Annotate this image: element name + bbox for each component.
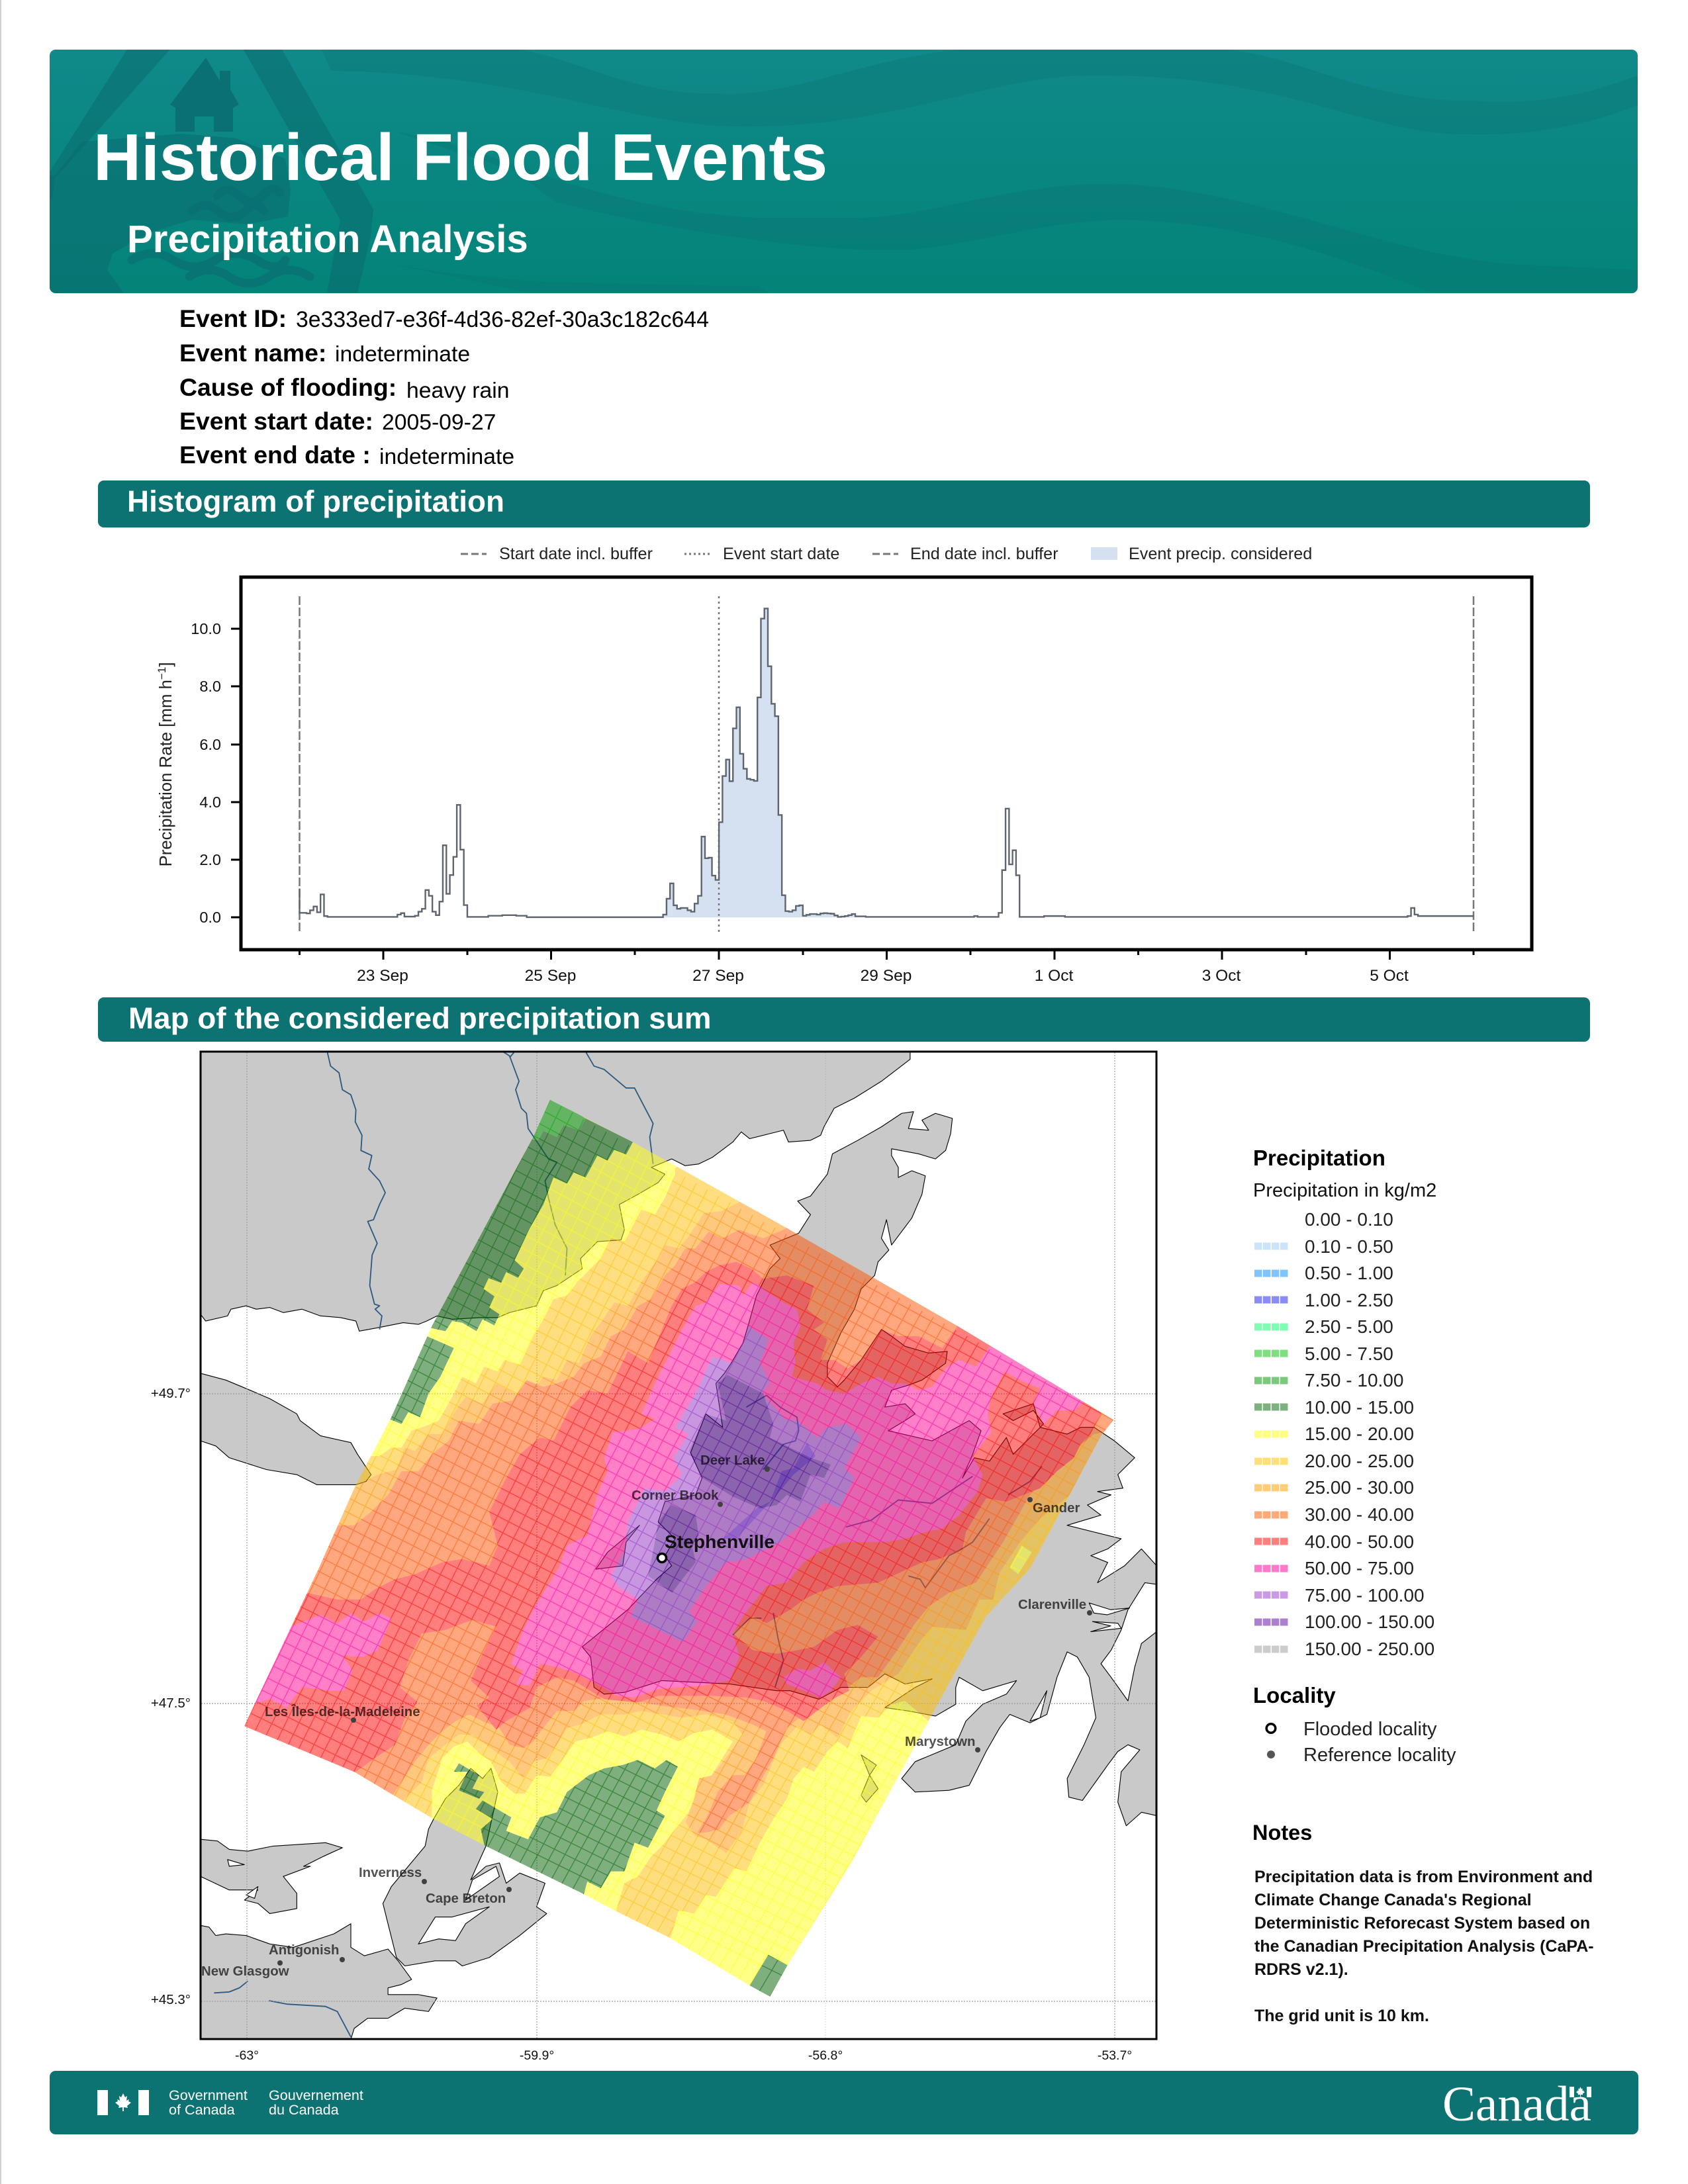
legend labels: 40.00 - 50.00 bbox=[1305, 1531, 1414, 1552]
graticule bbox=[201, 1052, 1156, 2038]
notes: Deterministic Reforecast System based on bbox=[1254, 1914, 1590, 1933]
section heading: histogram: Histogram of precipitation bbox=[127, 484, 504, 518]
event end date: Event end date : bbox=[179, 441, 371, 469]
reference locality labels: Deer Lake bbox=[700, 1453, 765, 1468]
notes bbox=[1252, 1821, 1594, 2025]
map bbox=[151, 1052, 1165, 2063]
event details bbox=[179, 304, 709, 469]
event id: 3e333ed7-e36f-4d36-82ef-30a3c182c644 bbox=[296, 307, 709, 332]
histogram chart: 2.0 bbox=[199, 851, 221, 868]
event name: indeterminate bbox=[335, 341, 470, 367]
event end date: indeterminate bbox=[379, 444, 514, 469]
buffer and event date lines bbox=[299, 596, 1474, 933]
flooded locality: Stephenville: Stephenville bbox=[665, 1531, 774, 1552]
government of canada wordmark: of Canada bbox=[169, 2101, 236, 2118]
reference locality labels: Cape Breton bbox=[426, 1891, 506, 1906]
event name: Event name: bbox=[179, 339, 326, 367]
notes: Notes bbox=[1252, 1821, 1312, 1844]
reference locality labels: Inverness bbox=[359, 1866, 422, 1880]
longitude labels: -59.9° bbox=[520, 2048, 554, 2063]
icon: water waves bbox=[127, 249, 314, 287]
histogram chart: 27 Sep bbox=[692, 967, 744, 985]
map frame bbox=[201, 1052, 1156, 2039]
x axis ticks and labels bbox=[299, 950, 1474, 960]
longitude labels: -53.7° bbox=[1098, 2048, 1132, 2063]
latitude labels: +47.5° bbox=[151, 1696, 191, 1711]
notes: Precipitation data is from Environment and bbox=[1254, 1868, 1593, 1886]
cause of flooding: heavy rain bbox=[406, 378, 509, 403]
land masses and rivers bbox=[201, 1052, 1156, 2039]
histogram legend bbox=[461, 545, 1312, 563]
icon: house bbox=[170, 58, 239, 132]
precipitation grid field bbox=[244, 1100, 1113, 1997]
header background artwork: waves and flood logo bbox=[50, 46, 1640, 296]
canada wordmark: Canada bbox=[1442, 2077, 1591, 2132]
precipitation considered fill bbox=[663, 608, 887, 917]
y axis title: −1 bbox=[156, 667, 168, 680]
histogram chart: 23 Sep bbox=[357, 967, 408, 985]
cause of flooding bbox=[179, 373, 509, 403]
page edge line bbox=[0, 0, 1, 2184]
histogram chart: 6.0 bbox=[199, 736, 221, 753]
legend: precipitation bbox=[1253, 1146, 1436, 1659]
legend labels: 7.50 - 10.00 bbox=[1305, 1370, 1403, 1390]
legend labels: 30.00 - 40.00 bbox=[1305, 1504, 1414, 1525]
reference locality labels: Les Îles-de-la-Madeleine bbox=[265, 1704, 420, 1719]
legend labels: 150.00 - 250.00 bbox=[1305, 1639, 1434, 1659]
water inlets bbox=[228, 1603, 1130, 1944]
histogram chart: 10.0 bbox=[191, 620, 221, 637]
longitude labels bbox=[235, 2048, 1132, 2063]
histogram chart: 3 Oct bbox=[1202, 967, 1241, 985]
legend: precipitation: Precipitation bbox=[1253, 1146, 1385, 1170]
legend: locality: Reference locality bbox=[1303, 1745, 1456, 1766]
reference locality markers bbox=[277, 1467, 1092, 1966]
longitude labels: -63° bbox=[235, 2048, 259, 2063]
event end date bbox=[179, 441, 514, 469]
reference locality labels: Marystown bbox=[905, 1735, 976, 1749]
legend labels: 0.10 - 0.50 bbox=[1305, 1236, 1393, 1257]
legend labels: 50.00 - 75.00 bbox=[1305, 1558, 1414, 1578]
histogram legend: Event start date bbox=[723, 545, 839, 563]
flooded locality: Stephenville bbox=[658, 1531, 774, 1562]
reference locality labels: Corner Brook bbox=[632, 1488, 719, 1503]
legend labels bbox=[1305, 1209, 1434, 1659]
y axis title: Precipitation Rate [mm h bbox=[157, 680, 175, 867]
precipitation step line bbox=[299, 608, 1474, 917]
icon: canada flag bbox=[97, 2090, 149, 2115]
section heading: histogram bbox=[98, 480, 1590, 527]
event start date: 2005-09-27 bbox=[382, 410, 496, 435]
notes: The grid unit is 10 km. bbox=[1254, 2007, 1429, 2025]
histogram chart: 4.0 bbox=[199, 794, 221, 811]
latitude labels bbox=[151, 1386, 191, 2007]
legend labels: 1.00 - 2.50 bbox=[1305, 1290, 1393, 1310]
notes: Climate Change Canada's Regional bbox=[1254, 1891, 1532, 1909]
subtitle: Precipitation Analysis bbox=[127, 218, 528, 261]
histogram chart: 5 Oct bbox=[1370, 967, 1409, 985]
government of canada wordmark bbox=[169, 2087, 363, 2118]
legend labels: 25.00 - 30.00 bbox=[1305, 1477, 1414, 1498]
reference locality labels: New Glasgow bbox=[201, 1964, 289, 1979]
section heading: map bbox=[98, 997, 1590, 1042]
y axis title: ] bbox=[157, 662, 175, 667]
footer bar bbox=[50, 2071, 1638, 2134]
government of canada wordmark: Government bbox=[169, 2087, 248, 2103]
notes: the Canadian Precipitation Analysis (CaPA- bbox=[1254, 1937, 1594, 1956]
legend labels: 10.00 - 15.00 bbox=[1305, 1397, 1414, 1418]
histogram chart: 1 Oct bbox=[1035, 967, 1073, 985]
event name bbox=[179, 339, 470, 367]
y axis ticks and labels bbox=[231, 629, 241, 917]
notes: RDRS v2.1). bbox=[1254, 1960, 1348, 1979]
histogram legend: End date incl. buffer bbox=[910, 545, 1058, 563]
header banner bbox=[50, 46, 1640, 296]
legend labels: 20.00 - 25.00 bbox=[1305, 1451, 1414, 1471]
legend labels: 0.50 - 1.00 bbox=[1305, 1263, 1393, 1283]
reference locality labels: Clarenville bbox=[1018, 1598, 1086, 1612]
histogram legend: Event precip. considered bbox=[1129, 545, 1312, 563]
reference locality labels: Antigonish bbox=[269, 1943, 339, 1958]
legend swatches bbox=[1254, 1246, 1289, 1649]
legend labels: 75.00 - 100.00 bbox=[1305, 1585, 1425, 1606]
event start date: Event start date: bbox=[179, 407, 373, 435]
legend labels: 5.00 - 7.50 bbox=[1305, 1343, 1393, 1364]
histogram chart: 25 Sep bbox=[525, 967, 576, 985]
government of canada wordmark: du Canada bbox=[269, 2101, 340, 2118]
government of canada wordmark: Gouvernement bbox=[269, 2087, 363, 2103]
histogram legend: Start date incl. buffer bbox=[499, 545, 653, 563]
histogram chart bbox=[156, 577, 1532, 985]
latitude labels: +45.3° bbox=[151, 1992, 191, 2007]
histogram chart: 29 Sep bbox=[861, 967, 912, 985]
legend labels: 2.50 - 5.00 bbox=[1305, 1316, 1393, 1337]
histogram chart: 0.0 bbox=[199, 909, 221, 926]
longitude labels: -56.8° bbox=[808, 2048, 843, 2063]
legend: locality: Locality bbox=[1253, 1683, 1336, 1707]
legend labels: 15.00 - 20.00 bbox=[1305, 1424, 1414, 1444]
reference locality labels bbox=[201, 1453, 1086, 1979]
section heading: map: Map of the considered precipitation sum bbox=[128, 1001, 711, 1035]
histogram chart: 8.0 bbox=[199, 678, 221, 695]
lake bbox=[723, 1443, 816, 1539]
title: Historical Flood Events bbox=[93, 121, 827, 195]
legend labels: 0.00 - 0.10 bbox=[1305, 1209, 1393, 1230]
rivers bbox=[214, 1052, 1042, 2037]
event id: Event ID: bbox=[179, 304, 287, 332]
event start date bbox=[179, 407, 496, 435]
cause of flooding: Cause of flooding: bbox=[179, 373, 397, 401]
legend: locality bbox=[1253, 1683, 1456, 1766]
latitude labels: +49.7° bbox=[151, 1386, 191, 1401]
legend: precipitation: Precipitation in kg/m2 bbox=[1253, 1180, 1436, 1201]
legend: locality: Flooded locality bbox=[1303, 1719, 1437, 1740]
reference locality labels: Gander bbox=[1033, 1501, 1080, 1516]
legend labels: 100.00 - 150.00 bbox=[1305, 1612, 1434, 1632]
